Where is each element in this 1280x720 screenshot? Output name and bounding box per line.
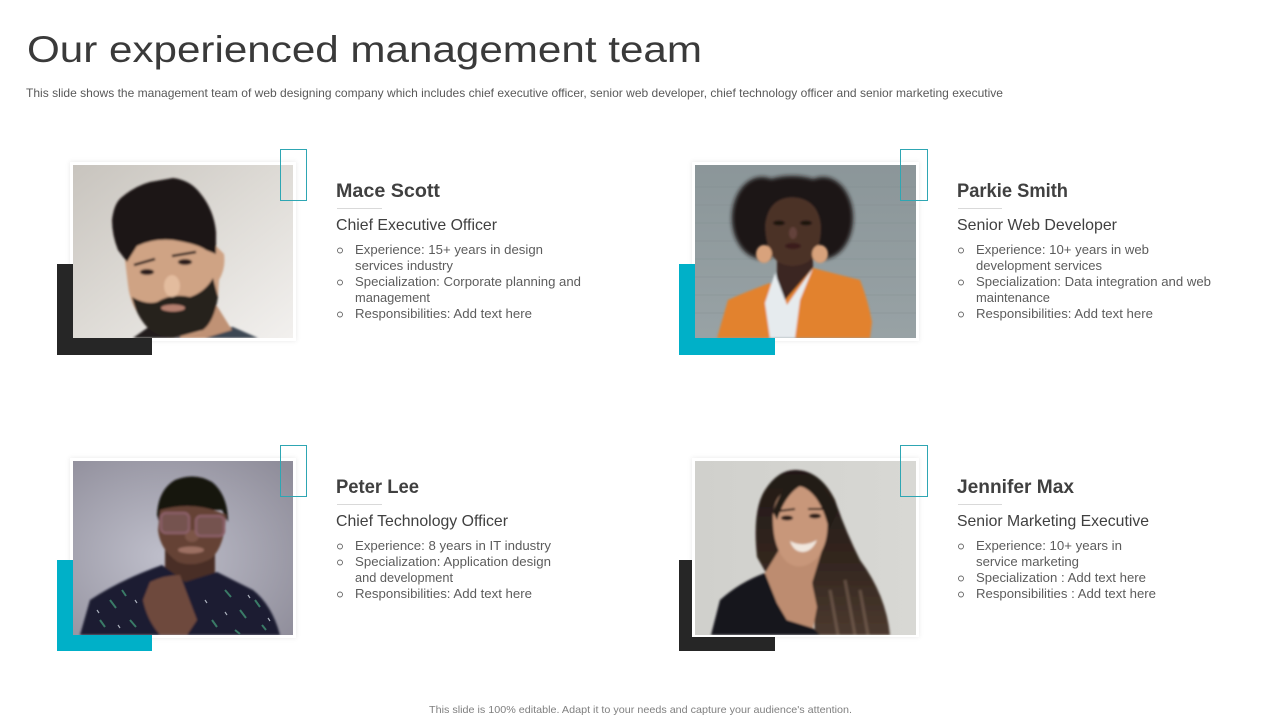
bullet list: [338, 538, 552, 601]
panel: Mace Scott: [57, 150, 581, 355]
bullet list: [338, 242, 581, 321]
bullet list: management: [355, 290, 430, 305]
role: Senior Marketing Executive: [957, 513, 1149, 530]
photo frame: [70, 458, 296, 638]
outline accent: [900, 446, 928, 496]
bullet list: services industry: [355, 258, 454, 273]
bullet list: maintenance: [976, 290, 1050, 305]
name: Peter Lee: [336, 476, 419, 498]
panel: Jennifer Max: [679, 446, 1156, 651]
bullet list: service marketing: [976, 554, 1079, 569]
role: Chief Executive Officer: [336, 217, 498, 234]
bullet list: Experience: 10+ years in web: [976, 242, 1149, 257]
subtitle: This slide shows the management team of web designing company which includes chief executive officer, senior web developer, chief technology officer and senior marketing executive: [26, 86, 1003, 100]
photo: Mace Scott: [73, 165, 293, 338]
role: Chief Technology Officer: [336, 513, 509, 530]
bullet list: Experience: 10+ years in: [976, 538, 1122, 553]
bullet list: and development: [355, 570, 453, 585]
bullet list: Specialization: Corporate planning and: [355, 274, 581, 289]
bullet list: [958, 538, 1156, 601]
accent corner: cyan: [57, 560, 152, 651]
bullet list: Specialization : Add text here: [976, 570, 1146, 585]
panel: Peter Lee: [57, 446, 552, 651]
accent corner: dark: [57, 264, 152, 355]
bullet list: Experience: 15+ years in design: [355, 242, 543, 257]
name: Mace Scott: [336, 180, 441, 202]
outline accent: [280, 150, 306, 200]
photo frame: [70, 162, 296, 341]
bullet list: development services: [976, 258, 1102, 273]
photo: Peter Lee: [73, 461, 293, 635]
outline accent: [280, 446, 306, 496]
name: Parkie Smith: [957, 180, 1068, 202]
bullet list: Specialization: Application design: [355, 554, 551, 569]
bullet list: Experience: 8 years in IT industry: [355, 538, 552, 553]
accent corner: dark: [679, 560, 775, 651]
photo frame: [692, 458, 919, 637]
panel: Parkie Smith: [679, 150, 1211, 355]
bullet list: Specialization: Data integration and web: [976, 274, 1211, 289]
footer note: This slide is 100% editable. Adapt it to your needs and capture your audience's attention.: [429, 704, 852, 716]
outline accent: [900, 150, 928, 200]
bullet list: Responsibilities: Add text here: [976, 306, 1153, 321]
role: Senior Web Developer: [957, 217, 1118, 234]
photo: Parkie Smith: [695, 165, 916, 338]
accent corner: cyan: [679, 264, 775, 355]
photo frame: [692, 162, 919, 341]
name: Jennifer Max: [957, 476, 1074, 498]
photo: Jennifer Max: [695, 461, 916, 635]
bullet list: Responsibilities : Add text here: [976, 586, 1156, 601]
title: Our experienced management team: [27, 29, 702, 70]
bullet list: Responsibilities: Add text here: [355, 586, 532, 601]
bullet list: Responsibilities: Add text here: [355, 306, 532, 321]
bullet list: [958, 242, 1211, 321]
